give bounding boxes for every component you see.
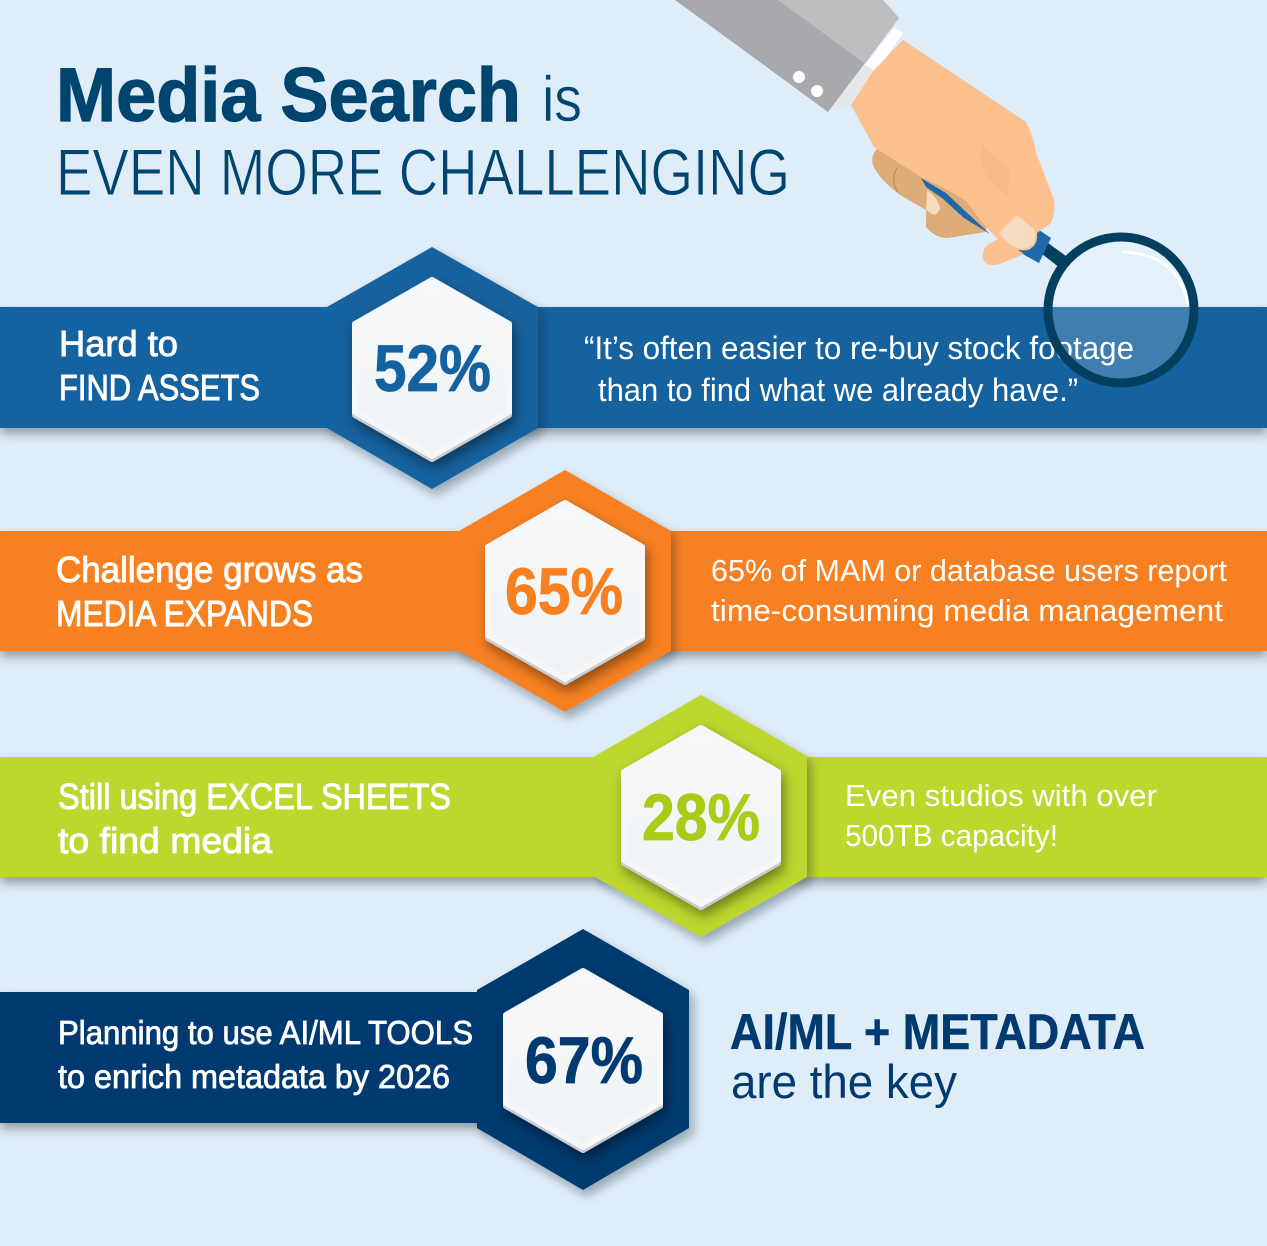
note: MAM users [711,553,1227,628]
label: hard to find assets: FIND ASSETS [59,367,260,408]
panel: excel sheets [0,695,1267,937]
title [56,53,790,209]
label: hard to find assets [59,323,260,408]
note: studios: 500TB capacity! [845,818,1058,853]
hexagon: 67% badge [506,971,660,1150]
panel: challenge grows [0,470,1267,712]
label: hard to find assets: Hard to [59,323,178,364]
hexagon: orange outer [459,470,671,712]
nail: middle finger [926,190,940,214]
label: challenge grows: Challenge grows as [56,549,363,590]
stat: 28%: 28% [642,780,760,854]
label: excel sheets: to find media [58,820,273,861]
magnifier highlight [1123,252,1188,304]
magnifier lens [1049,238,1193,382]
lens stem [1042,243,1066,268]
nail: thumb [999,215,1036,249]
stat: 52%: 52% [374,331,491,405]
note: studios: Even studios with over [845,778,1157,813]
quote: than to find what we already have.” [598,372,1078,408]
hexagon: 65% badge [488,503,642,682]
palm and thumb [851,40,1054,250]
conclusion: AI/ML + METADATA [730,1004,1145,1060]
title: Media Search [56,53,521,138]
panel: AI/ML tools [0,929,1145,1190]
conclusion: are the key [731,1055,957,1108]
panel: hard to find assets [0,247,1267,489]
label: challenge grows: MEDIA EXPANDS [56,593,313,634]
quote: “It’s often easier to re-buy stock footage [584,330,1134,366]
title: is [542,63,582,135]
hexagon: navy outer [477,929,689,1190]
magnifier ring [1048,237,1194,383]
lower finger tip [983,238,1024,265]
handle grip [921,178,990,234]
sleeve [675,0,903,112]
quote [584,330,1134,408]
hexagon: 52% badge [355,280,509,459]
label: excel sheets: Still using EXCEL SHEETS [58,776,451,817]
note: studios [845,778,1157,853]
hexagon: blue outer [327,247,538,489]
lower fingers [872,148,1000,238]
note: MAM users: 65% of MAM or database users report [711,553,1227,588]
label: challenge grows [56,549,363,634]
band: green [0,757,1267,877]
hexagon: 28% badge [624,728,778,907]
stat: 67%: 67% [525,1023,643,1097]
title: EVEN MORE CHALLENGING [56,135,790,209]
label: AI/ML tools: to enrich metadata by 2026 [58,1058,450,1095]
knuckle lines [980,145,1010,196]
band: navy [0,992,500,1123]
note: MAM users: time-consuming media management [711,593,1223,628]
icon: hand holding magnifying glass [675,0,1194,383]
band: blue [0,307,1267,428]
label: AI/ML tools: Planning to use AI/ML TOOLS [58,1014,473,1051]
band: orange [0,531,1267,651]
label: AI/ML tools [58,1014,473,1095]
hexagon: green outer [595,695,807,937]
label: excel sheets [58,776,451,861]
stat: 65%: 65% [505,554,623,628]
conclusion [730,1004,1145,1108]
handle ferrule [1017,230,1051,263]
